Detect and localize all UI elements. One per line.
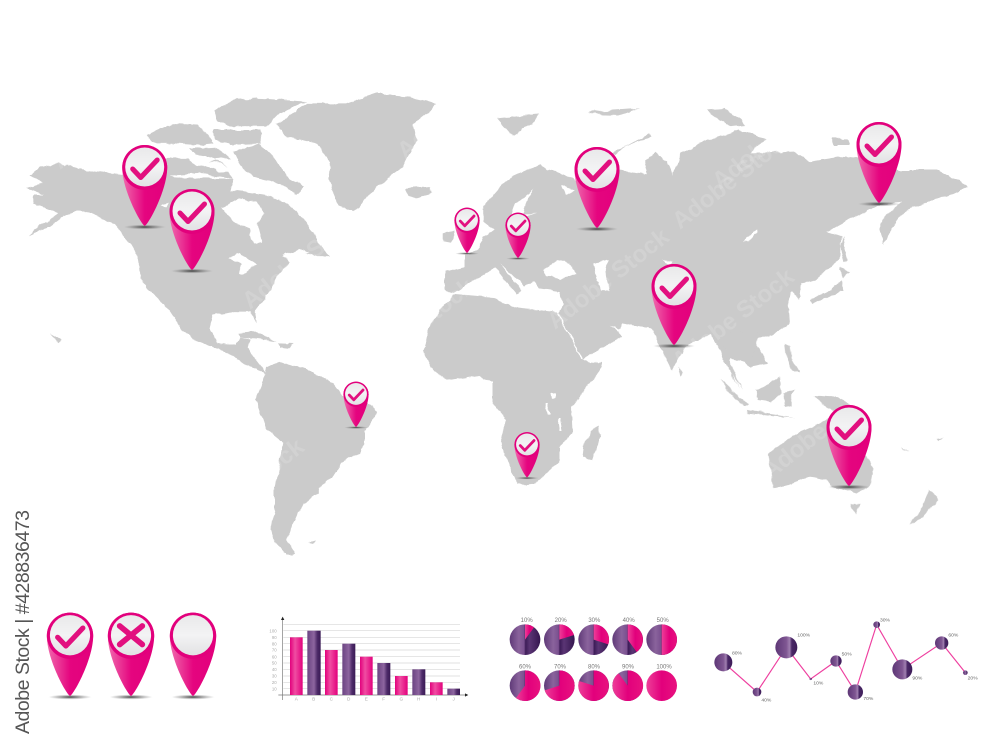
bar chart bbox=[269, 617, 468, 702]
bubble labels bbox=[732, 618, 978, 703]
y axis labels: 40 bbox=[272, 667, 277, 672]
watermark: Adobe Stock bbox=[667, 263, 800, 375]
y axis labels: 90 bbox=[272, 635, 277, 640]
y axis labels: 80 bbox=[272, 641, 277, 646]
world map bbox=[27, 93, 968, 555]
pie labels: 10% bbox=[521, 618, 533, 624]
eurasia bbox=[443, 108, 968, 388]
x axis labels: F bbox=[382, 697, 385, 702]
bubble labels: 100% bbox=[797, 633, 811, 639]
madagascar bbox=[583, 425, 600, 460]
pie labels bbox=[519, 618, 672, 671]
pin: australia bbox=[826, 405, 872, 489]
x axis labels: B bbox=[312, 697, 315, 702]
pin: brazil bbox=[343, 382, 369, 429]
pie labels: 20% bbox=[555, 618, 567, 624]
bubble labels: 80% bbox=[732, 650, 743, 656]
pin: central europe bbox=[505, 213, 531, 260]
x axis labels: D bbox=[347, 697, 351, 702]
x axis labels: G bbox=[400, 697, 404, 702]
x axis labels: E bbox=[365, 697, 368, 702]
pie row two bbox=[510, 670, 677, 701]
pie labels: 70% bbox=[554, 665, 567, 671]
bars bbox=[290, 631, 460, 695]
pie labels: 100% bbox=[656, 665, 672, 671]
pie labels: 80% bbox=[588, 665, 601, 671]
pin: canada north bbox=[122, 145, 167, 229]
bubble labels: 20% bbox=[968, 676, 978, 682]
y axis labels: 100 bbox=[269, 628, 277, 633]
y axis labels: 10 bbox=[272, 686, 277, 691]
connector line bbox=[723, 625, 965, 692]
pin: russia east bbox=[856, 122, 902, 206]
watermark: Adobe Stock bbox=[757, 373, 890, 485]
bubble labels: 50% bbox=[842, 652, 852, 658]
stock id side label: Adobe Stock | #428836473 bbox=[12, 510, 34, 734]
pie charts bbox=[510, 618, 677, 701]
x axis labels: A bbox=[295, 697, 299, 702]
x axis labels: I bbox=[436, 697, 437, 702]
bubble labels: 40% bbox=[761, 697, 772, 703]
pie labels: 60% bbox=[519, 665, 532, 671]
bubble labels: 90% bbox=[912, 675, 923, 681]
y axis labels: 20 bbox=[272, 680, 277, 685]
pin: russia west bbox=[574, 147, 620, 231]
watermark: Adobe Stock bbox=[347, 273, 480, 385]
pin: south africa bbox=[514, 432, 540, 479]
africa bbox=[423, 294, 602, 485]
pie labels: 30% bbox=[588, 618, 601, 624]
x axis labels: H bbox=[417, 697, 420, 702]
bubble labels: 60% bbox=[948, 633, 959, 639]
watermark: Adobe Stock bbox=[177, 433, 310, 545]
legend pin: check bbox=[47, 613, 93, 700]
watermark bbox=[47, 53, 890, 545]
africa lakes bbox=[545, 392, 562, 430]
north america and greenland bbox=[27, 93, 437, 375]
watermark: Adobe Stock bbox=[392, 53, 525, 165]
y axis labels: 50 bbox=[272, 661, 277, 666]
bubble line chart bbox=[714, 618, 978, 703]
pie row one bbox=[510, 624, 677, 655]
south america bbox=[255, 362, 377, 555]
legend pin: blank bbox=[170, 613, 216, 700]
pie labels: 90% bbox=[622, 665, 635, 671]
bubble labels: 70% bbox=[863, 696, 874, 702]
watermark: Adobe Stock bbox=[707, 83, 840, 195]
axes bbox=[278, 619, 466, 700]
y axis labels: 30 bbox=[272, 674, 277, 679]
watermark: Adobe Stock bbox=[667, 123, 800, 235]
y axis labels bbox=[269, 628, 277, 691]
watermark: Adobe Stock bbox=[542, 223, 675, 335]
bubbles bbox=[714, 621, 968, 700]
bubble labels: 30% bbox=[880, 618, 891, 624]
y axis labels: 70 bbox=[272, 648, 277, 653]
pin: western europe bbox=[454, 208, 480, 255]
watermark: Adobe Stock bbox=[237, 203, 370, 315]
x axis labels bbox=[295, 697, 455, 702]
y axis labels: 60 bbox=[272, 654, 277, 659]
hudson bay bbox=[222, 198, 263, 243]
watermark: Adobe Stock bbox=[47, 63, 180, 175]
pin: india bbox=[652, 264, 696, 348]
x axis labels: J bbox=[453, 697, 455, 702]
x axis labels: C bbox=[330, 697, 334, 702]
pie labels: 50% bbox=[657, 618, 669, 624]
pin: north america central bbox=[170, 189, 214, 273]
legend pin: cross bbox=[108, 613, 154, 700]
pie labels: 40% bbox=[623, 618, 635, 624]
bubble labels: 10% bbox=[813, 681, 824, 687]
oceania and southeast asia bbox=[708, 330, 943, 525]
